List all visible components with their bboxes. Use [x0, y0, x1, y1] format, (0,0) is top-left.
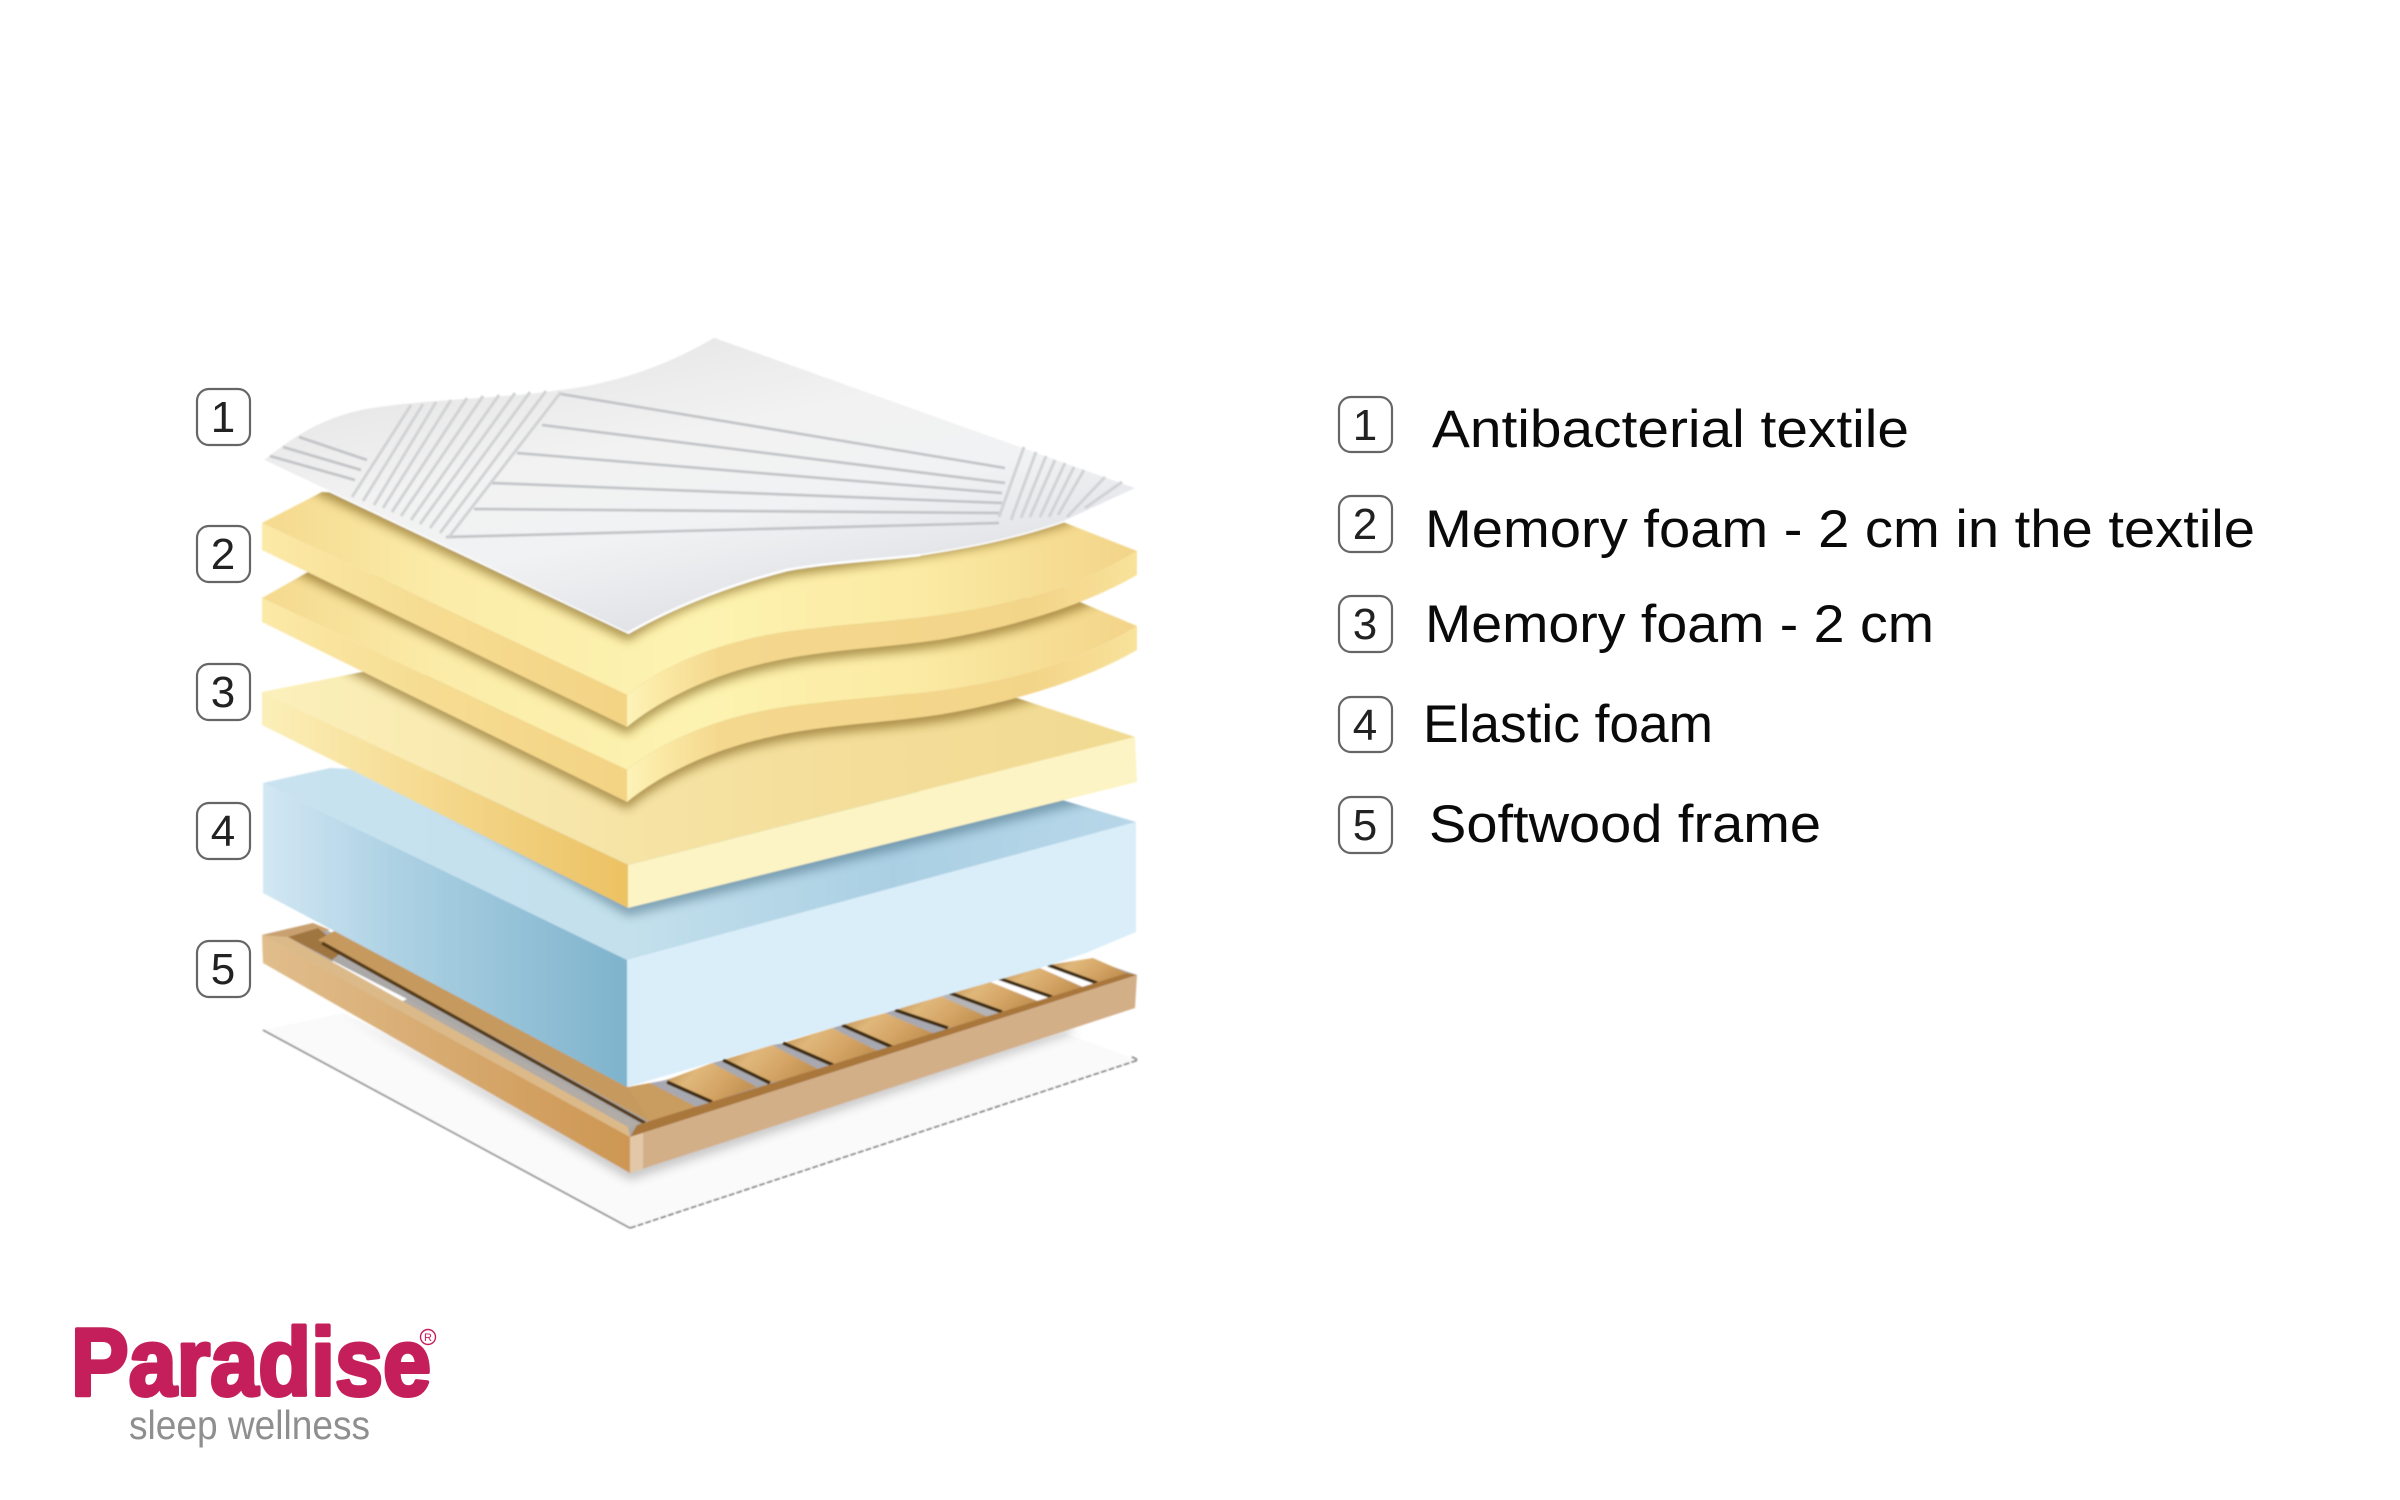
- legend item 1: 1: [1353, 401, 1377, 450]
- wooden slats: [650, 958, 1127, 1107]
- badge 3: 3: [211, 668, 235, 717]
- layer 2: memory foam lower: [262, 572, 1137, 809]
- corner cavity and back strip: [262, 923, 330, 937]
- badge 1: 1: [211, 393, 235, 442]
- badge 4: 4: [211, 807, 235, 856]
- layer 5: softwood frame: [262, 923, 1137, 1173]
- legend item 1: Antibacterial textile: [1432, 400, 1909, 459]
- legend item 5: 5: [1353, 801, 1377, 850]
- badge 2: 2: [211, 530, 235, 579]
- registered mark: R: [424, 1332, 432, 1344]
- badge 5: 5: [211, 945, 235, 994]
- legend item 2: 2: [1353, 500, 1377, 549]
- legend item 3: Memory foam - 2 cm: [1425, 595, 1934, 654]
- base white panel: [263, 1012, 1138, 1228]
- badge 3: [197, 664, 250, 720]
- frame strips and faces: [262, 935, 630, 1137]
- top antibacterial textile: [263, 337, 1137, 641]
- quilted fan lines: [270, 394, 1005, 537]
- left number badges: [197, 389, 250, 997]
- logo: Paradise sleep wellness: [71, 1309, 436, 1448]
- badge 5: [197, 941, 250, 997]
- legend item 3: 3: [1353, 600, 1377, 649]
- wordmark: Paradise: [71, 1309, 431, 1416]
- mattress layers illustration: [262, 337, 1138, 1228]
- layer 1: memory foam upper: [262, 492, 1137, 734]
- left rail: [318, 925, 660, 1122]
- legend item 5: Softwood frame: [1429, 795, 1821, 854]
- quilted diagonal stripes: [352, 391, 1122, 537]
- badge 2: [197, 526, 250, 582]
- badge 1: [197, 389, 250, 445]
- legend item 2: Memory foam - 2 cm in the textile: [1425, 500, 2255, 559]
- badge 4: [197, 803, 250, 859]
- legend item 4: Elastic foam: [1423, 695, 1713, 754]
- layer 4: elastic foam (blue): [263, 768, 1136, 1087]
- tagline: sleep wellness: [129, 1402, 370, 1448]
- legend: [1339, 397, 2255, 854]
- layer 3: flat foam: [262, 672, 1137, 916]
- registered mark: [420, 1330, 436, 1344]
- legend item 4: 4: [1353, 701, 1377, 750]
